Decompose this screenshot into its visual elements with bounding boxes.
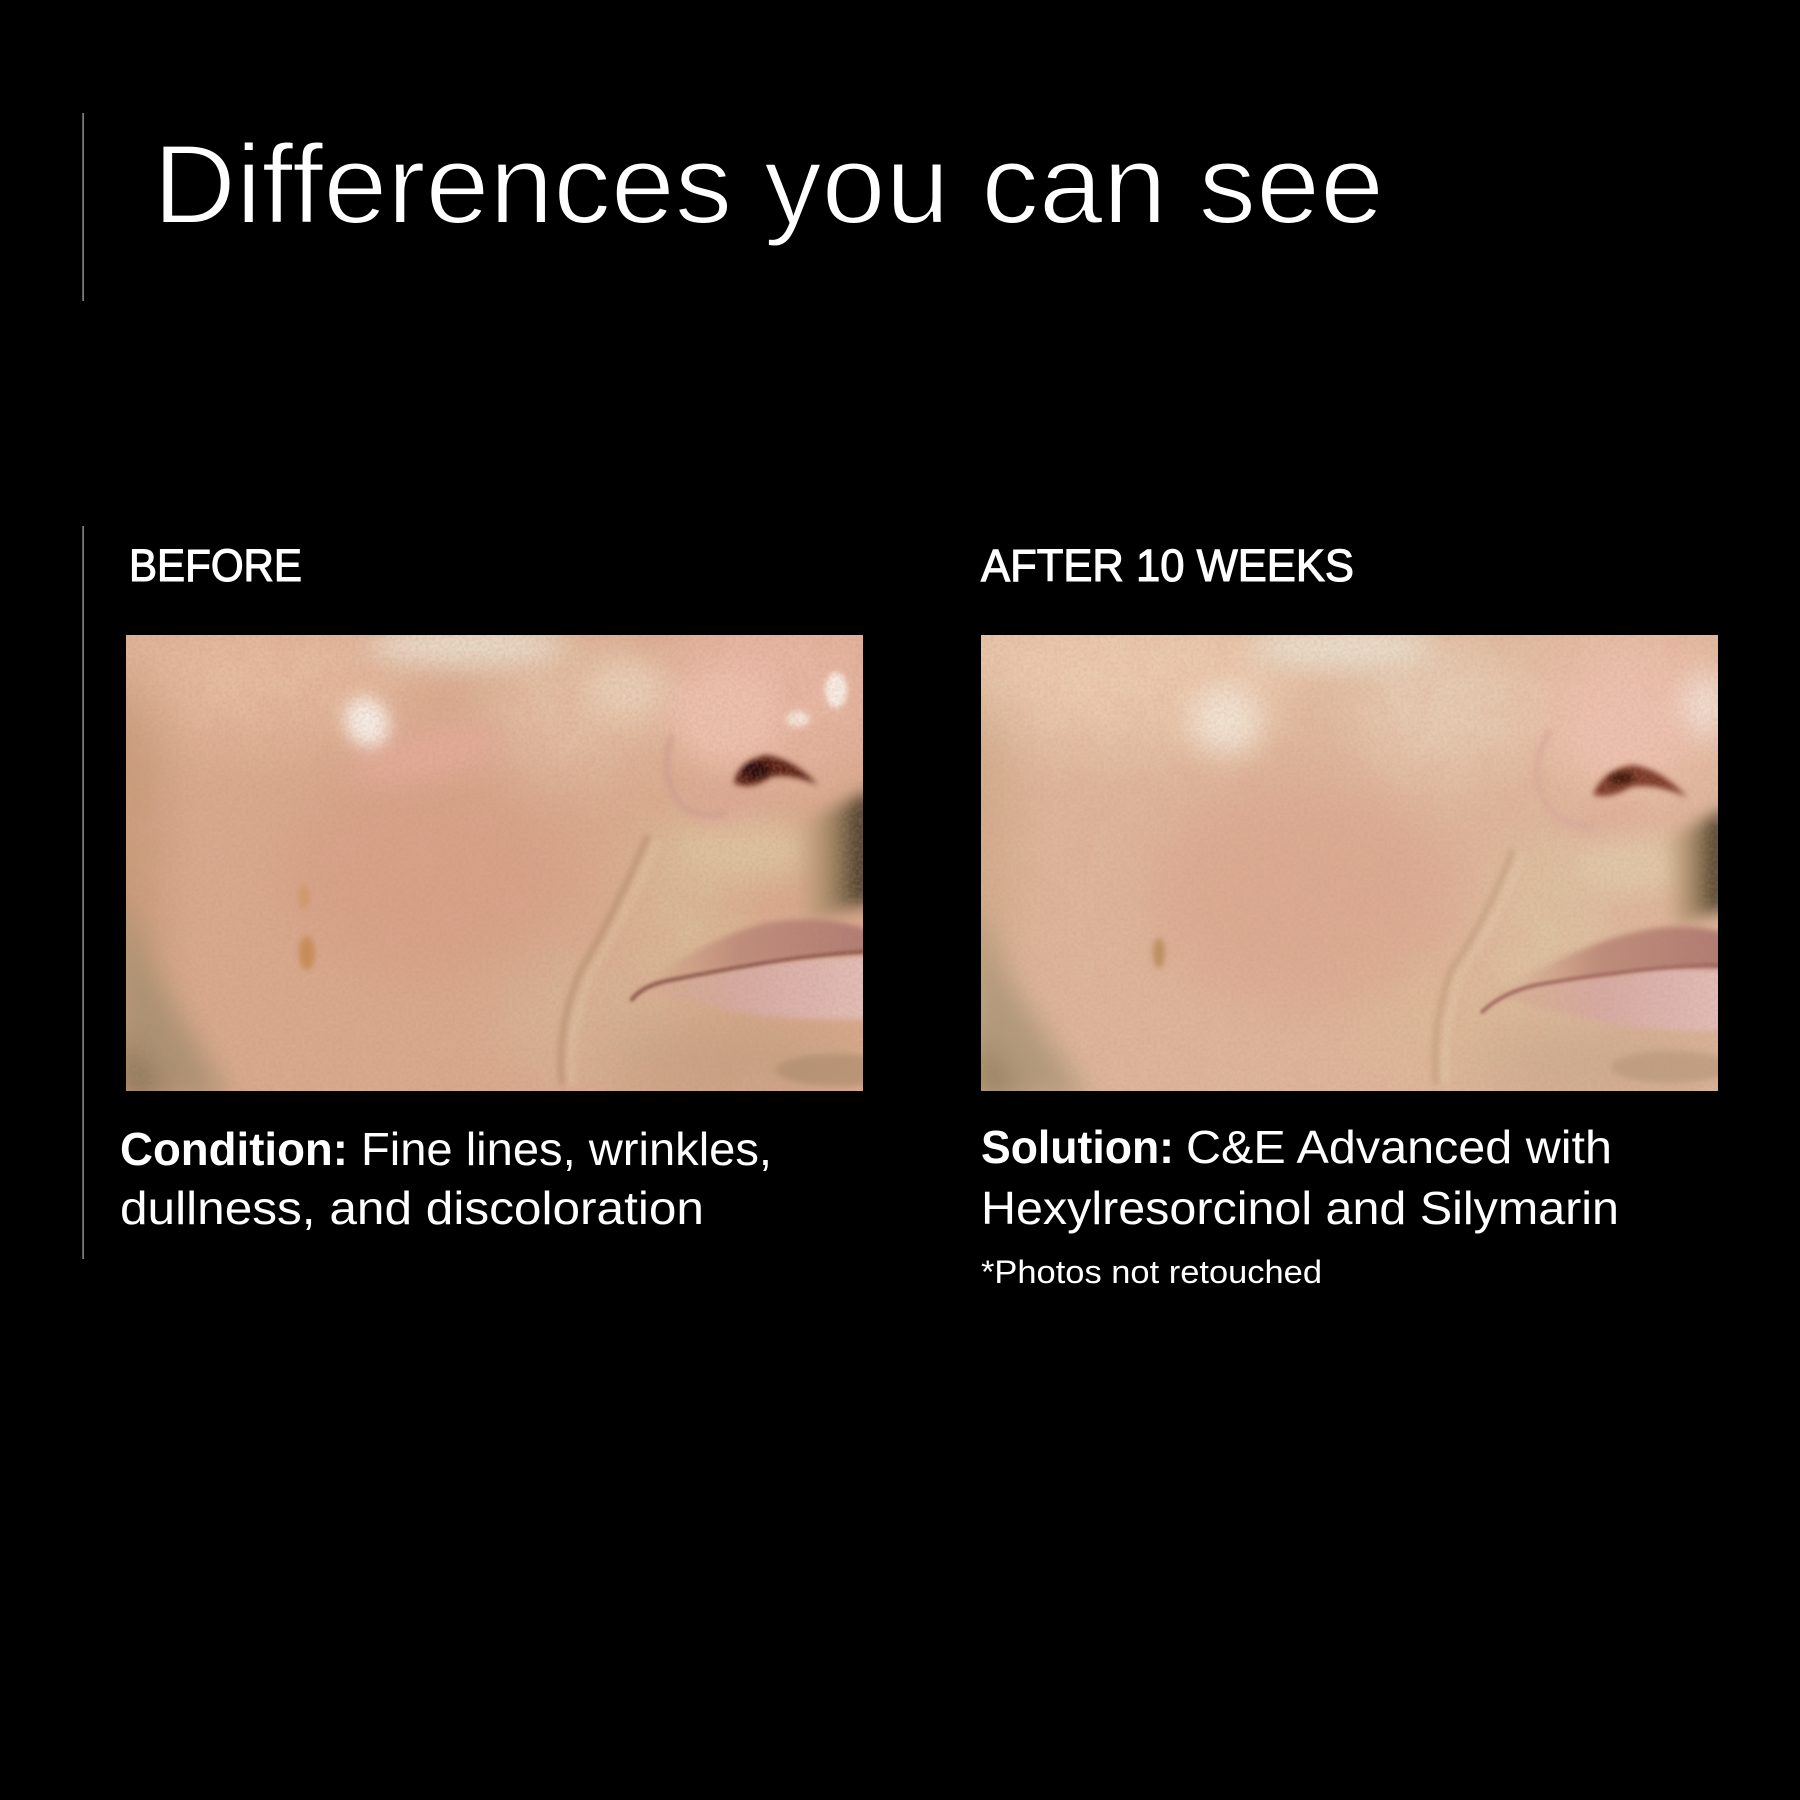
skin grain xyxy=(126,635,863,1091)
caption: condition: Condition: xyxy=(120,1123,348,1175)
caption: condition: Fine lines, wrinkles, xyxy=(361,1123,772,1175)
nostril xyxy=(734,755,818,786)
nasolabial fold xyxy=(1435,850,1513,1085)
skin grain xyxy=(981,635,1718,1091)
title: Differences you can see xyxy=(153,122,1384,247)
nose shadow and philtrum xyxy=(799,782,863,920)
highlight on cheek xyxy=(336,689,398,755)
nasolabial fold xyxy=(561,835,648,1085)
heading: before: BEFORE xyxy=(129,540,302,591)
footnote: *Photos not retouched xyxy=(981,1254,1322,1290)
caption: solution: C&E Advanced with xyxy=(1186,1121,1612,1173)
nostril xyxy=(1593,765,1687,797)
lips xyxy=(669,917,863,974)
skin mottling xyxy=(981,635,1718,1091)
spots xyxy=(298,884,310,910)
photo: before xyxy=(126,635,863,1091)
lips xyxy=(1530,924,1718,982)
heading: after 10 weeks: AFTER 10 WEEKS xyxy=(981,540,1354,591)
nose shadow and philtrum xyxy=(1666,800,1718,926)
caption: solution: Solution: xyxy=(981,1121,1174,1173)
comparison divider line xyxy=(82,526,84,1259)
caption: solution: Hexylresorcinol and Silymarin xyxy=(981,1182,1619,1234)
caption: solution xyxy=(981,1121,1619,1234)
photo: after 10 weeks xyxy=(981,635,1718,1091)
caption: condition: dullness, and discoloration xyxy=(120,1182,704,1234)
title divider line xyxy=(82,113,84,301)
caption: condition xyxy=(120,1123,772,1234)
skin mottling xyxy=(126,635,863,1091)
